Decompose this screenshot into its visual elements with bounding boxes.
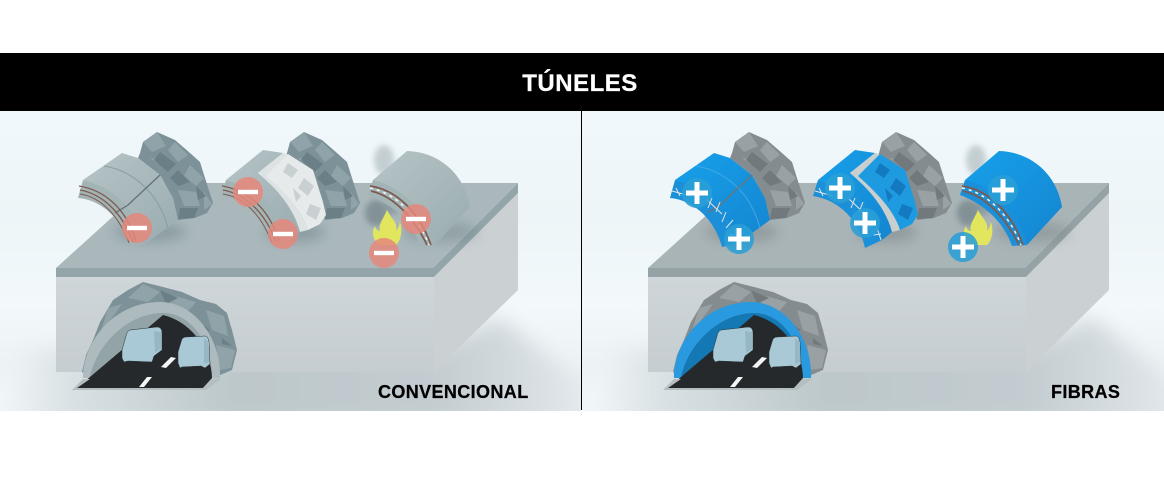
segment: fibre ground movement bbox=[813, 150, 918, 248]
smoke bbox=[957, 145, 993, 226]
label: convencional: CONVENCIONAL bbox=[378, 382, 529, 402]
slab bbox=[56, 183, 518, 372]
icon: minus signs bbox=[122, 177, 431, 268]
tunnel entrance bbox=[663, 282, 828, 390]
segment: damaged joint bbox=[78, 153, 186, 247]
icon: flame bbox=[373, 210, 401, 245]
segment: fire bbox=[368, 151, 478, 246]
icon: plus signs bbox=[682, 173, 1018, 262]
segment: fibre joint bbox=[670, 153, 778, 247]
icon: flame bbox=[964, 210, 992, 245]
title bar: TÚNELES bbox=[522, 69, 638, 97]
divider bbox=[581, 111, 582, 410]
segment: ground movement bbox=[221, 150, 326, 248]
rocks behind segments bbox=[730, 132, 952, 220]
panel: fibras bbox=[572, 111, 1164, 425]
tunnel entrance bbox=[72, 282, 237, 390]
panel: convencional bbox=[0, 111, 581, 425]
segment: fibre fire bbox=[960, 151, 1070, 246]
label: fibras: FIBRAS bbox=[1051, 382, 1120, 402]
slab bbox=[648, 183, 1109, 372]
rocks behind segments bbox=[138, 132, 360, 220]
smoke bbox=[365, 145, 401, 226]
title bar bbox=[0, 53, 1164, 111]
